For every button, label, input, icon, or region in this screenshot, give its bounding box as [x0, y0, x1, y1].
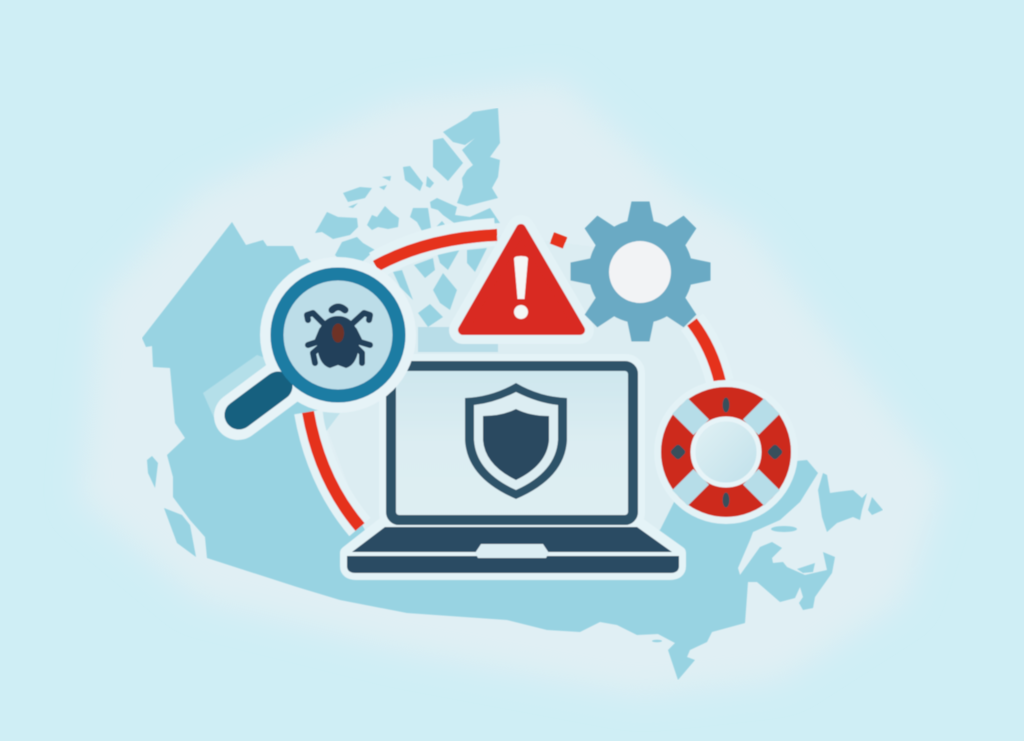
life preserver halo — [654, 380, 798, 524]
triangle halo — [463, 229, 580, 330]
magnifying glass — [238, 257, 416, 416]
pale patch behind handle — [203, 355, 300, 425]
gear — [570, 202, 710, 342]
life preserver — [654, 380, 798, 524]
center disc — [693, 419, 759, 485]
ring segments — [308, 235, 720, 527]
exclamation mark — [514, 256, 528, 319]
shield — [465, 383, 567, 499]
bug legs — [307, 307, 370, 363]
ring halo — [308, 232, 720, 527]
laptop — [347, 361, 679, 573]
handle — [239, 386, 278, 415]
shield outer — [465, 383, 567, 499]
west coast islands — [147, 456, 196, 557]
full scene — [142, 108, 883, 680]
gear body — [570, 202, 710, 342]
rope knots — [670, 398, 783, 508]
red connecting ring — [308, 232, 720, 527]
trackpad — [475, 544, 549, 558]
inner light zone — [320, 235, 725, 530]
warning triangle — [463, 229, 580, 330]
shield band — [474, 392, 558, 490]
eastern islets — [652, 497, 883, 642]
light bands — [672, 398, 780, 506]
background glow — [80, 80, 945, 695]
shield core — [483, 409, 549, 480]
mainland — [142, 222, 835, 680]
screen — [391, 366, 633, 520]
lens — [277, 274, 399, 396]
Newfoundland — [818, 473, 867, 532]
laptop halo — [347, 361, 679, 573]
bug body — [317, 316, 359, 368]
laptop base — [347, 556, 679, 573]
magnifier halo — [238, 257, 416, 416]
ring — [676, 402, 776, 502]
gear hub — [609, 241, 671, 303]
arctic islands — [315, 108, 500, 433]
bug marking — [332, 324, 344, 342]
bug — [307, 307, 370, 368]
triangle — [463, 229, 580, 330]
map of Canada — [142, 108, 883, 680]
keyboard deck — [352, 527, 672, 552]
